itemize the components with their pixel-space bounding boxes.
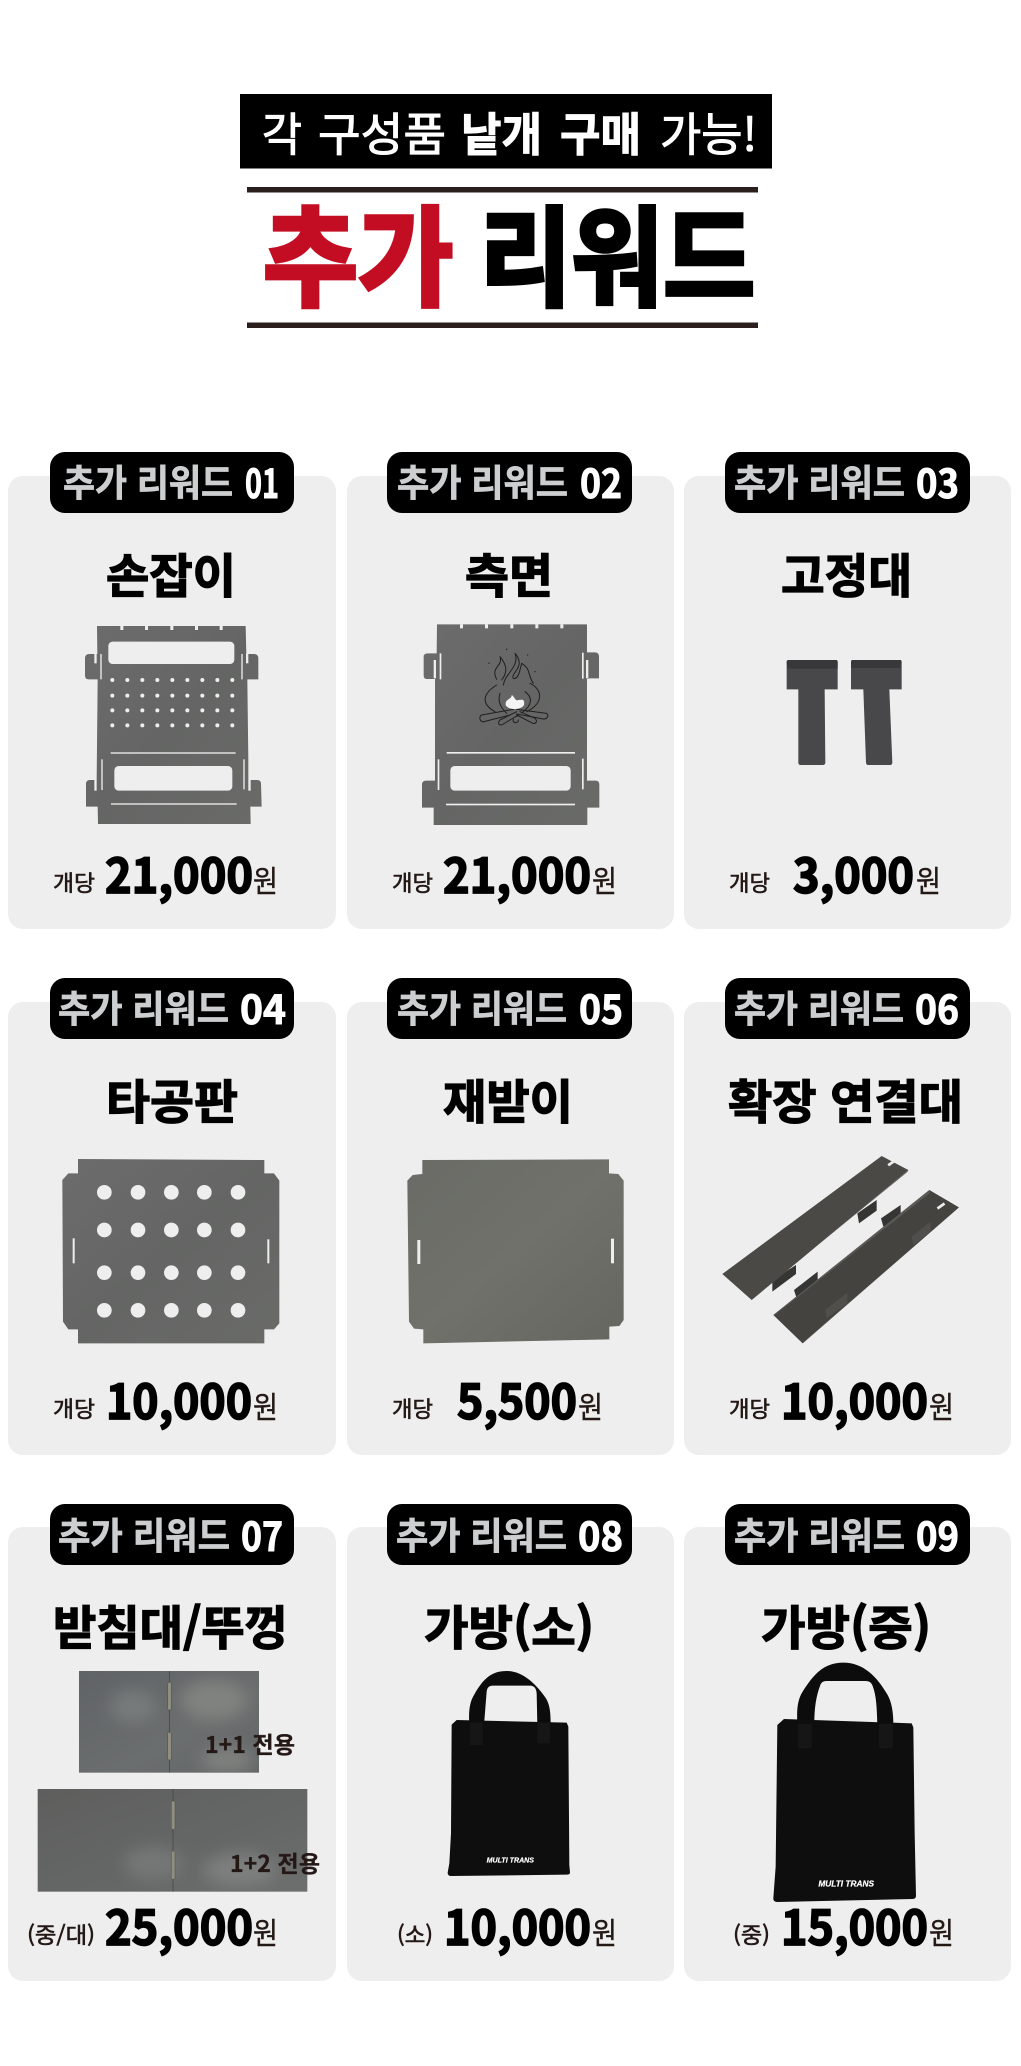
main title: 리워드 bbox=[480, 173, 755, 329]
badge 06 bbox=[725, 978, 970, 1039]
image: small black bag bbox=[448, 1671, 570, 1876]
price 01: 개당 bbox=[53, 866, 95, 898]
badge 03: 추가 리워드 bbox=[734, 453, 905, 507]
badge 05: 05 bbox=[579, 978, 623, 1036]
badge 07: 추가 리워드 bbox=[58, 1506, 230, 1560]
price 02: 개당 bbox=[392, 866, 433, 898]
header: purchase note banner: 가능! bbox=[660, 99, 757, 165]
price 03 bbox=[729, 837, 941, 907]
panel: reward 05 ash tray bbox=[347, 978, 674, 1455]
header: purchase note banner bbox=[240, 94, 772, 168]
badge 05: 추가 리워드 bbox=[397, 979, 567, 1033]
price 02: 원 bbox=[592, 857, 617, 901]
badge 09 bbox=[725, 1504, 970, 1565]
image: hinged plates bbox=[38, 1671, 307, 1892]
price 04: 원 bbox=[253, 1383, 278, 1427]
icon: campfire engraving bbox=[480, 649, 548, 725]
header: purchase note banner: 구성품 bbox=[318, 99, 446, 165]
price 09: 15,000 bbox=[781, 1889, 928, 1959]
price 06: 10,000 bbox=[781, 1363, 928, 1433]
product name: 가방(소) bbox=[424, 1590, 594, 1659]
main title: 추가 bbox=[263, 173, 453, 329]
price 07: 25,000 bbox=[105, 1889, 253, 1959]
price 06 bbox=[729, 1363, 954, 1433]
price 06: 개당 bbox=[729, 1392, 770, 1424]
badge 04: 추가 리워드 bbox=[58, 979, 229, 1033]
badge 03: 03 bbox=[916, 452, 959, 510]
price 05: 5,500 bbox=[457, 1363, 577, 1433]
price 03: 3,000 bbox=[793, 837, 914, 907]
badge 09: 추가 리워드 bbox=[734, 1506, 905, 1560]
badge 01 bbox=[50, 452, 294, 513]
image: ash tray plate bbox=[407, 1159, 624, 1343]
image: medium black bag bbox=[773, 1663, 916, 1902]
badge 09: 09 bbox=[916, 1505, 959, 1563]
product name: 확장 연결대 bbox=[728, 1064, 963, 1133]
price 06: 원 bbox=[929, 1383, 954, 1427]
price 07 bbox=[27, 1889, 278, 1959]
price 02: 21,000 bbox=[443, 837, 591, 907]
main title bbox=[247, 173, 758, 329]
note: 1+1 only: 1+1 전용 bbox=[205, 1726, 295, 1760]
panel: reward 01 handle bbox=[8, 452, 336, 929]
price 04: 개당 bbox=[53, 1392, 95, 1424]
panel: reward 06 extension connector bbox=[684, 978, 1011, 1455]
product name: 측면 bbox=[465, 538, 553, 607]
badge 01: 01 bbox=[245, 452, 279, 510]
badge 07: 07 bbox=[241, 1505, 283, 1563]
product name: 손잡이 bbox=[106, 538, 236, 607]
header: purchase note banner: 구매 bbox=[560, 99, 641, 165]
price 03: 원 bbox=[916, 857, 941, 901]
price 07: (중/대) bbox=[27, 1918, 95, 1950]
price 09: (중) bbox=[733, 1918, 770, 1950]
price 08: (소) bbox=[397, 1918, 433, 1950]
panel: reward 03 fixing bar bbox=[684, 452, 1011, 929]
badge 03 bbox=[725, 452, 970, 513]
note: 1+2 only: 1+2 전용 bbox=[230, 1845, 320, 1879]
badge 07 bbox=[50, 1504, 294, 1565]
product name: 재받이 bbox=[443, 1064, 573, 1133]
bag logo: MULTI TRANS bbox=[818, 1879, 874, 1889]
product name: 고정대 bbox=[781, 538, 912, 607]
panel: reward 04 perforated plate bbox=[8, 978, 336, 1455]
badge 04 bbox=[50, 978, 294, 1039]
image: side plate with campfire bbox=[422, 624, 599, 825]
price 02 bbox=[392, 837, 617, 907]
badge 02 bbox=[387, 452, 632, 513]
bag logo: MULTI TRANS bbox=[487, 1855, 535, 1864]
image: two T brackets bbox=[787, 660, 902, 765]
badge 02: 추가 리워드 bbox=[397, 453, 568, 507]
panel: reward 09 medium bag bbox=[684, 1504, 1011, 1981]
badge 08: 추가 리워드 bbox=[396, 1506, 567, 1560]
image: two connector rails bbox=[722, 1156, 959, 1343]
header: purchase note banner: 낱개 bbox=[461, 99, 542, 165]
product name: 받침대/뚜껑 bbox=[53, 1590, 288, 1659]
price 01: 21,000 bbox=[105, 837, 253, 907]
badge 05 bbox=[387, 978, 632, 1039]
product name: 타공판 bbox=[106, 1064, 238, 1133]
badge 04: 04 bbox=[240, 978, 286, 1036]
badge 02: 02 bbox=[580, 452, 622, 510]
image: handle plate bbox=[85, 626, 262, 824]
price 08: 원 bbox=[592, 1909, 617, 1953]
price 01: 원 bbox=[253, 857, 278, 901]
badge 08: 08 bbox=[578, 1505, 623, 1563]
header: purchase note banner: 각 bbox=[262, 99, 302, 165]
price 05: 원 bbox=[578, 1383, 603, 1427]
panel: reward 08 small bag bbox=[347, 1504, 674, 1981]
panel: reward 07 stand and lid bbox=[8, 1504, 336, 1981]
price 09: 원 bbox=[929, 1909, 954, 1953]
price 03: 개당 bbox=[729, 866, 770, 898]
badge 06: 06 bbox=[915, 978, 959, 1036]
badge 08 bbox=[387, 1504, 632, 1565]
price 01 bbox=[53, 837, 278, 907]
badge 06: 추가 리워드 bbox=[734, 979, 904, 1033]
product name: 가방(중) bbox=[761, 1590, 931, 1659]
price 05 bbox=[392, 1363, 603, 1433]
price 05: 개당 bbox=[392, 1392, 433, 1424]
badge 01: 추가 리워드 bbox=[63, 453, 233, 507]
panel: reward 02 side plate bbox=[347, 452, 674, 929]
image: perforated plate bbox=[62, 1159, 279, 1343]
price 04 bbox=[53, 1363, 278, 1433]
price 07: 원 bbox=[253, 1909, 278, 1953]
price 04: 10,000 bbox=[106, 1363, 252, 1433]
price 08: 10,000 bbox=[444, 1889, 591, 1959]
